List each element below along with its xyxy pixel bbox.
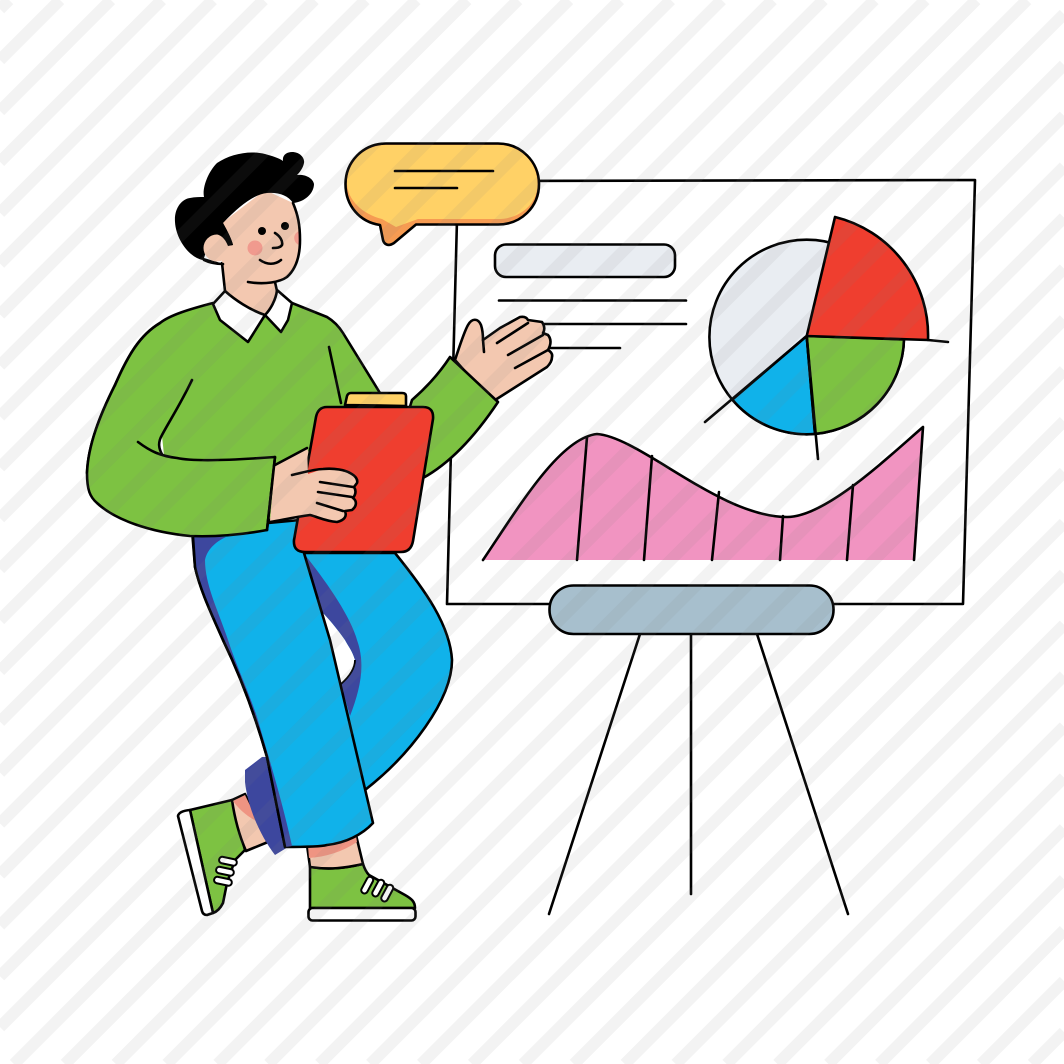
- ear: [204, 234, 230, 262]
- sweater arm crease: [159, 380, 192, 456]
- front leg trouser: [192, 520, 373, 847]
- cheeks: [248, 231, 300, 256]
- hand wrist behind clipboard: [270, 448, 315, 522]
- right raised sleeve: [400, 357, 498, 478]
- hair: [175, 152, 314, 264]
- raised hand: [455, 317, 552, 402]
- sleeve: [87, 385, 275, 536]
- face: [222, 190, 300, 283]
- head: [175, 152, 314, 283]
- text lines on board: [499, 300, 686, 348]
- area chart: [483, 427, 923, 560]
- collar: [213, 290, 292, 342]
- face outline, nose and mouth: [204, 203, 300, 283]
- sleeve outline: [138, 347, 341, 530]
- person: [87, 152, 552, 920]
- presentation board: [447, 180, 975, 604]
- back ankle: [232, 794, 268, 851]
- speech bubble: [346, 144, 539, 245]
- neck: [222, 262, 277, 316]
- clipboard clip: [345, 393, 406, 406]
- back trouser cuff: [245, 757, 288, 855]
- holding hand fingers: [270, 448, 357, 522]
- eyes: [258, 222, 289, 235]
- board stand: [549, 586, 848, 914]
- pie chart: [705, 217, 948, 459]
- front leg shoe: [308, 864, 416, 920]
- back leg shoe: [178, 800, 245, 915]
- sweater cuff edge: [267, 457, 275, 530]
- sideburn tip over ear: [214, 223, 233, 246]
- outer arm outline: [87, 323, 267, 536]
- clipboard: [294, 407, 433, 552]
- back leg trouser: [304, 553, 452, 790]
- front ankle: [307, 835, 363, 868]
- sweater torso: [87, 303, 380, 520]
- heading placeholder on board: [495, 244, 675, 277]
